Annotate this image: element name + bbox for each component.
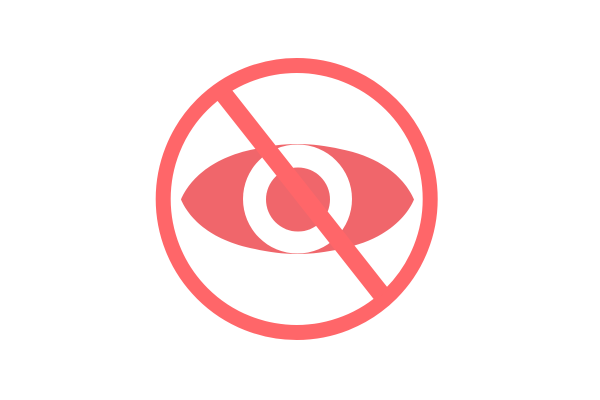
eye shape xyxy=(181,144,414,254)
prohibition slash xyxy=(224,94,382,295)
iris: white ring xyxy=(243,144,352,254)
prohibition ring xyxy=(163,66,430,332)
pupil xyxy=(266,168,330,232)
